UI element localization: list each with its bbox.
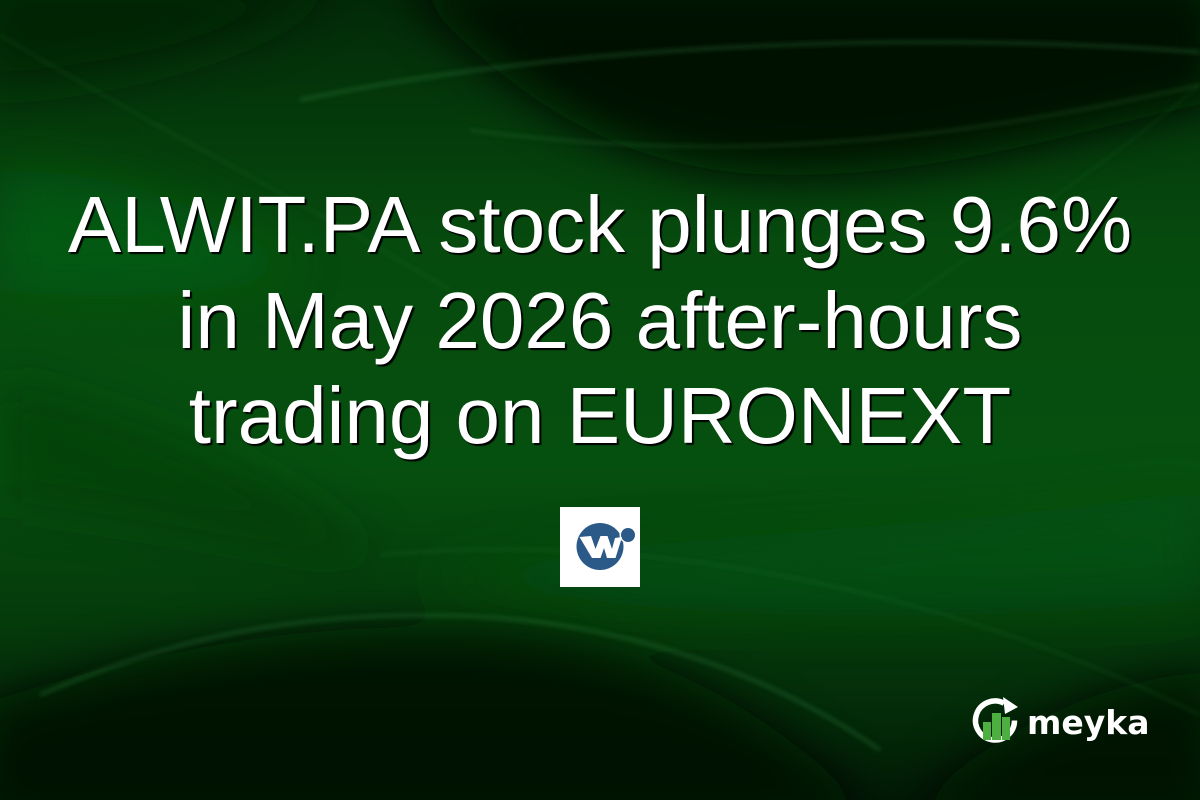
wordmark: meyka: [1027, 703, 1150, 742]
icon: ring with arrow and bars: [976, 697, 1018, 740]
title: in May 2026 after-hours: [178, 276, 1022, 364]
icon: company logo: [560, 507, 640, 587]
title: [68, 180, 1132, 462]
brand logo: meyka: [972, 697, 1150, 743]
title: ALWIT.PA stock plunges 9.6%: [68, 180, 1132, 269]
title: trading on EURONEXT: [189, 371, 1011, 460]
